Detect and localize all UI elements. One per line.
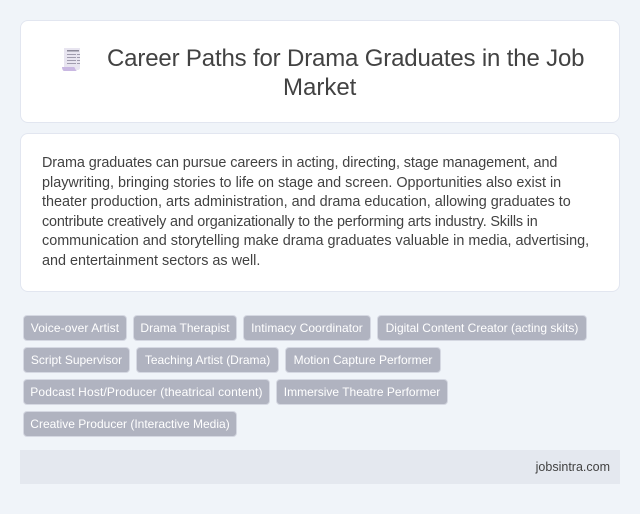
tag list — [23, 315, 587, 437]
tag — [285, 347, 441, 373]
tag — [136, 347, 279, 373]
tag: Drama Therapist — [140, 321, 230, 335]
title: Market — [283, 74, 356, 101]
tag — [23, 315, 127, 341]
tag — [243, 315, 371, 341]
tag: Script Supervisor — [31, 353, 122, 367]
description text: theater production, arts administration, and drama education, allowing graduates to — [42, 194, 571, 210]
icon: paper scroll — [62, 48, 80, 71]
panel: title card — [20, 20, 620, 123]
tag: Digital Content Creator (acting skits) — [386, 321, 578, 335]
title: Career Paths for Drama Graduates in the Job — [107, 45, 584, 72]
tag — [377, 315, 587, 341]
title — [107, 45, 584, 101]
tag: Teaching Artist (Drama) — [145, 353, 270, 367]
description text: Drama graduates can pursue careers in acting, directing, stage management, and — [42, 155, 557, 171]
description text: contribute creatively and organizationally to the performing arts industry. Skills in — [42, 214, 538, 230]
tag: Creative Producer (Interactive Media) — [30, 417, 230, 431]
description text — [42, 155, 589, 268]
description text: and entertainment sectors as well. — [42, 252, 260, 268]
footer bar — [20, 450, 620, 484]
tag: Voice-over Artist — [31, 321, 119, 335]
description text: communication and storytelling make drama graduates valuable in media, advertising, — [42, 233, 589, 249]
tag — [133, 315, 237, 341]
footer source text: jobsintra.com — [536, 460, 610, 474]
tag — [276, 379, 448, 405]
tag — [23, 379, 270, 405]
tag: Podcast Host/Producer (theatrical content) — [30, 385, 263, 399]
tag — [23, 411, 237, 437]
tag: Intimacy Coordinator — [251, 321, 363, 335]
tag — [23, 347, 130, 373]
tag: Immersive Theatre Performer — [284, 385, 440, 399]
tag: Motion Capture Performer — [294, 353, 432, 367]
description text: playwriting, bringing stories to life on stage and screen. Opportunities also exist in — [42, 174, 561, 190]
panel: description card — [20, 133, 620, 292]
